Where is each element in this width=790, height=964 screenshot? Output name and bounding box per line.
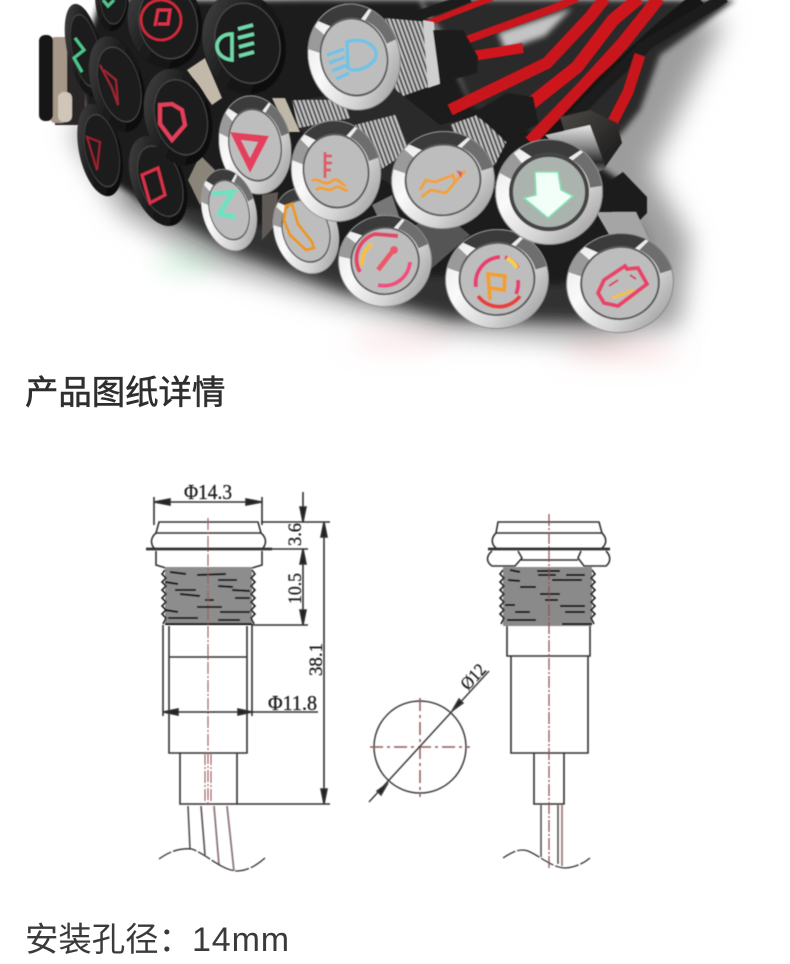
dimension: head diameter 14.3: Φ14.3 [184, 480, 232, 504]
centre cross [370, 698, 470, 797]
chrome button: amber engine [262, 179, 350, 283]
chrome button: green N [192, 162, 266, 258]
dimension: body diameter 11.8: Φ11.8 [268, 691, 317, 715]
chrome button: amber oil can [385, 124, 501, 236]
dimension: 3.6 [261, 492, 330, 549]
cast shadow under the lights [70, 0, 725, 342]
rear black buttons [39, 0, 297, 234]
dimension: head diameter 14.3 [154, 480, 262, 525]
dimension: 10.5: 10.5 [285, 573, 306, 604]
black button: top green partial [95, 0, 129, 31]
coloured light reflections [155, 254, 680, 358]
wires and break line [503, 805, 590, 868]
chrome button: green down arrow [495, 139, 603, 245]
chrome button: blue headlight [296, 0, 412, 121]
threaded section [500, 567, 595, 626]
dimension: total length 38.1: 38.1 [306, 643, 327, 676]
dimension: hole diameter 12: Ø12 [456, 660, 490, 694]
dark mass behind the buttons [78, 0, 630, 285]
black button: green N [58, 0, 110, 100]
heading: product drawing details: 产品图纸详情 [25, 375, 225, 412]
black button: red hood [79, 30, 155, 138]
dimension: 3.6: 3.6 [285, 523, 306, 546]
dimension: total length 38.1 [237, 522, 330, 804]
chrome button: red circle i [328, 204, 442, 318]
barrel of battery light [607, 172, 647, 227]
barrel and stem [507, 626, 590, 804]
threaded section [162, 567, 255, 625]
barrel of oil light [300, 85, 510, 190]
dimension: 10.5 [252, 549, 308, 625]
black button: red battery [117, 128, 199, 234]
barrel of arrow light [560, 110, 622, 170]
centre line [548, 514, 550, 868]
wires and break line [159, 806, 265, 871]
gap of light between wires [498, 8, 572, 50]
chrome button: coolant temperature [283, 113, 389, 229]
chrome button: parking brake [439, 222, 555, 336]
hole circle [374, 701, 466, 793]
black button: red parking brake [119, 0, 211, 76]
chrome threaded barrels and black sleeves [187, 18, 652, 270]
dimension: hole diameter 12 [369, 660, 490, 802]
chrome button: red battery [560, 226, 680, 340]
edge-on button at far left [39, 35, 85, 125]
metal fragments between buttons [187, 58, 222, 105]
barrel and stem [163, 625, 252, 804]
head, flange and hex nut [488, 522, 610, 566]
black button: red engine [133, 61, 223, 173]
barrel of blue light [385, 18, 437, 100]
drawing: front view [488, 514, 610, 868]
head, flange and nut outline [146, 522, 272, 568]
dimension: body diameter 11.8 [163, 691, 318, 715]
dark base of the wire bundle [420, 0, 735, 135]
black button: red triangle [70, 100, 130, 200]
chrome button: red warning triangle [211, 90, 299, 200]
chrome buttons with lit icons [192, 0, 680, 340]
centre line [205, 518, 211, 805]
drawing: mounting hole [369, 660, 490, 802]
drawing: side view with dimensions [146, 480, 330, 871]
wires: red and black bundle [410, 0, 725, 145]
product photo: indicator lights [39, 0, 735, 358]
caption: mounting hole diameter: 安装孔径：14mm [25, 921, 290, 959]
black button: green headlight [191, 0, 297, 104]
